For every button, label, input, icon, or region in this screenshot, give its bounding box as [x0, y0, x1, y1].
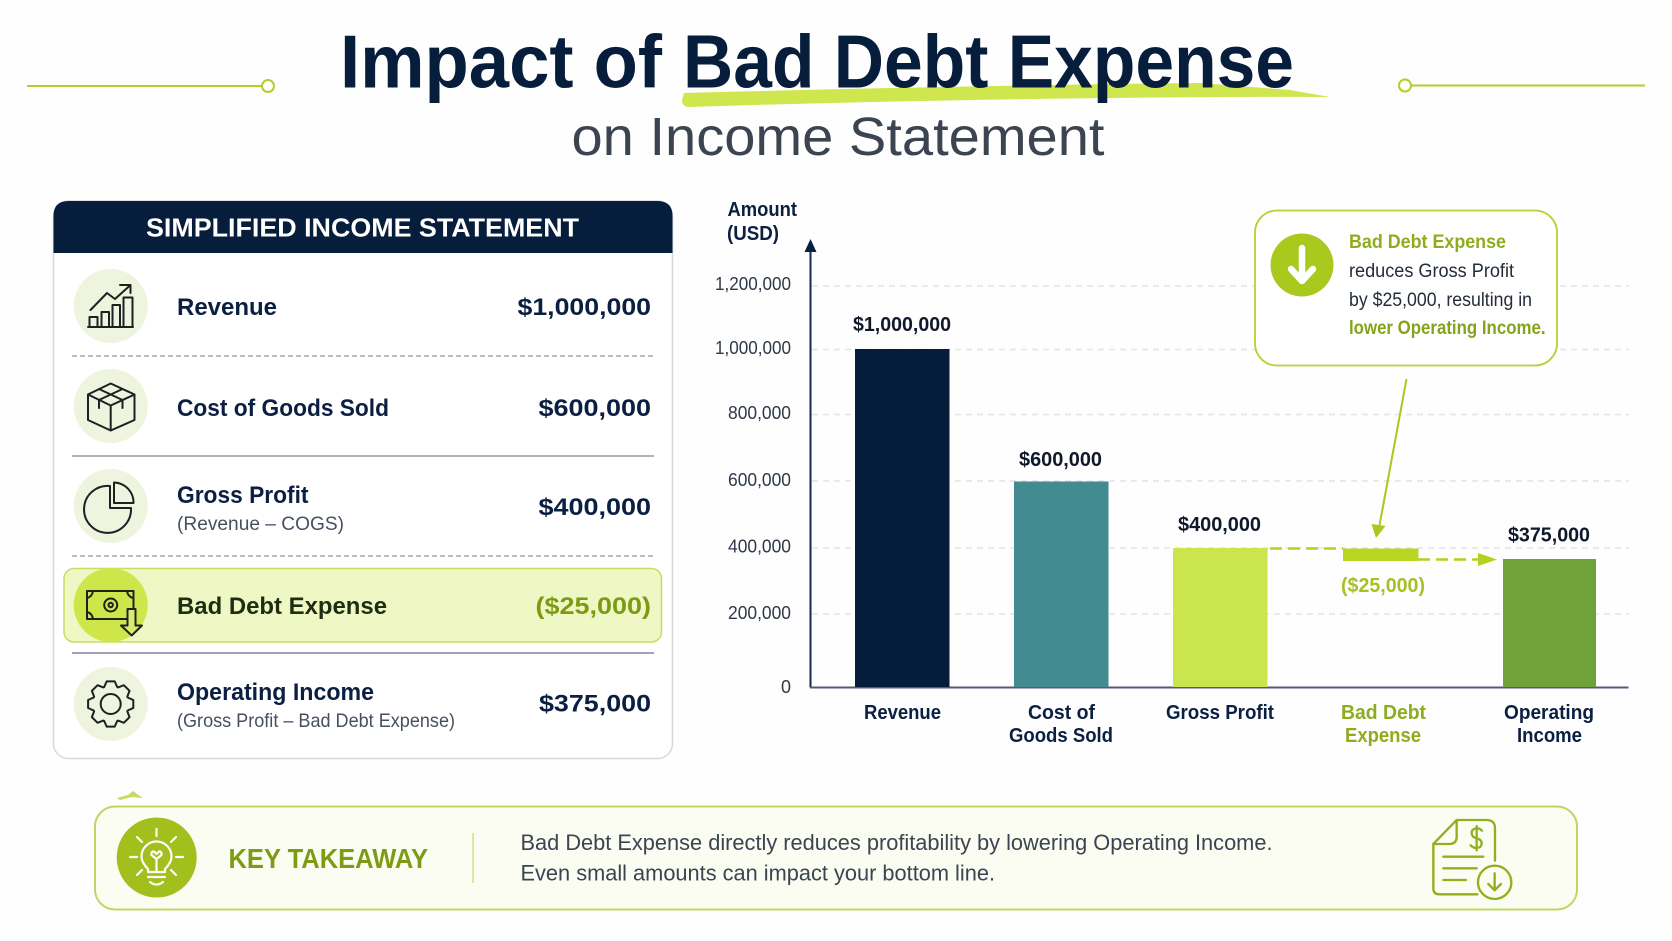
x axis baseline [810, 686, 1628, 688]
arrow: gross profit to bad debt [1270, 547, 1343, 550]
icon: cash with down arrow [87, 591, 142, 636]
row: gross profit [74, 469, 651, 543]
row: operating income: Operating Income [177, 679, 374, 706]
bar: revenue [853, 313, 951, 724]
row: operating income: (Gross Profit – Bad Debt Expense) [177, 710, 455, 732]
callout text: reduces Gross Profit [1349, 260, 1515, 282]
panel header [54, 201, 672, 253]
row: cost of goods sold: Cost of Goods Sold [177, 395, 389, 422]
y axis labels [715, 273, 791, 697]
bar: bad debt expense: Expense [1345, 724, 1421, 747]
y axis labels: 600,000 [728, 469, 791, 490]
arrow: callout to bad debt bar [1372, 379, 1406, 538]
y axis labels: 0 [781, 676, 791, 697]
bar: cost of goods sold [1009, 448, 1113, 747]
bar: operating income: $375,000 [1508, 524, 1590, 546]
takeaway text [520, 830, 1272, 886]
main title: Impact of [340, 20, 663, 104]
bar: bad debt expense [1341, 548, 1426, 747]
bar: cost of goods sold: $600,000 [1019, 448, 1102, 471]
icon: pie chart [84, 482, 134, 533]
subtitle: on Income Statement [572, 107, 1104, 167]
icon: growth chart [88, 285, 133, 327]
y axis labels: 400,000 [728, 536, 791, 556]
title block [340, 20, 1330, 167]
row: revenue [74, 269, 651, 343]
icon: document with down arrow [1433, 820, 1511, 899]
callout text: by $25,000, resulting in [1349, 289, 1532, 311]
row: gross profit: (Revenue – COGS) [177, 513, 344, 535]
panel: key takeaway [95, 806, 1577, 910]
bar: gross profit: $400,000 [1178, 513, 1261, 536]
row: operating income [74, 667, 651, 741]
row: bad debt expense (highlighted): ($25,000) [536, 593, 651, 620]
bar: operating income [1503, 524, 1596, 747]
bar: gross profit: Gross Profit [1166, 701, 1274, 724]
y axis labels: 1,000,000 [715, 337, 791, 358]
takeaway text: Even small amounts can impact your bottom line. [520, 860, 995, 886]
bar: gross profit [1166, 513, 1274, 724]
y axis title: (USD) [727, 223, 779, 245]
row: bad debt expense (highlighted) [64, 568, 662, 642]
callout text: lower Operating Income. [1349, 317, 1546, 339]
panel header: SIMPLIFIED INCOME STATEMENT [146, 212, 579, 242]
row: cost of goods sold [74, 369, 651, 443]
main title: Bad Debt Expense [683, 20, 1294, 104]
y axis title: Amount [728, 199, 797, 221]
stray green mark [117, 791, 143, 800]
panel card [54, 201, 672, 758]
row: gross profit: $400,000 [538, 494, 651, 521]
left title ornament [27, 80, 274, 92]
icon: box [88, 384, 134, 430]
row: gross profit: Gross Profit [177, 482, 308, 509]
bar: operating income: Income [1517, 724, 1582, 747]
bar: bad debt expense: Bad Debt [1341, 701, 1426, 724]
bar chart [715, 199, 1629, 747]
bar: cost of goods sold: Cost of [1028, 701, 1095, 724]
y axis labels: 200,000 [728, 602, 791, 623]
bar: revenue: $1,000,000 [853, 313, 951, 336]
callout text [1349, 231, 1546, 339]
callout [1255, 210, 1557, 366]
icon: light bulb [117, 818, 197, 898]
row: revenue: Revenue [177, 294, 277, 321]
icon: down arrow [1270, 234, 1334, 296]
bar: cost of goods sold: Goods Sold [1009, 724, 1113, 747]
bar: revenue: Revenue [864, 701, 941, 724]
takeaway text: Bad Debt Expense directly reduces profitability by lowering Operating Income. [520, 830, 1272, 855]
bar: operating income: Operating [1504, 701, 1594, 724]
y axis [804, 239, 816, 688]
row: cost of goods sold: $600,000 [538, 395, 651, 422]
y axis labels: 1,200,000 [715, 273, 791, 294]
icon: gear [88, 681, 133, 727]
y axis labels: 800,000 [728, 402, 791, 423]
title underline brush [682, 83, 1330, 107]
row: revenue: $1,000,000 [518, 294, 651, 321]
right title ornament [1399, 80, 1645, 92]
arrow: bad debt to operating income [1418, 553, 1497, 566]
panel: simplified income statement [54, 201, 672, 758]
row: operating income: $375,000 [539, 690, 651, 718]
bar: bad debt expense: ($25,000) [1341, 574, 1425, 597]
row: bad debt expense (highlighted): Bad Debt Expense [177, 593, 387, 620]
key takeaway label: KEY TAKEAWAY [228, 843, 428, 874]
callout text: Bad Debt Expense [1349, 231, 1506, 253]
